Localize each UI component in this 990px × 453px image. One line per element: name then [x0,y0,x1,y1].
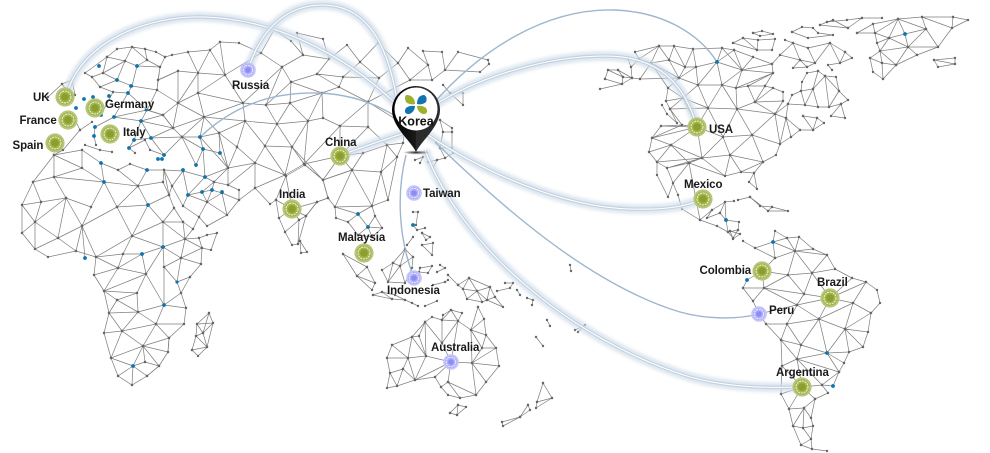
country labels: France [20,115,57,127]
arc: Korea to Argentina [425,150,802,387]
marker: Colombia [752,261,772,281]
country labels: Brazil [817,277,848,289]
country labels: Taiwan [423,188,461,200]
country labels: Indonesia [387,285,440,297]
country labels: USA [709,124,733,136]
country labels: China [325,137,357,149]
arc: Korea to USA [430,56,697,127]
mesh: Eurasia [48,30,489,253]
marker: Spain [45,133,65,153]
marker: Russia [240,62,256,78]
country labels: UK [33,92,50,104]
country labels: Colombia [700,265,752,277]
marker: Peru [751,306,767,322]
country labels: Malaysia [338,232,386,244]
arc: Korea to Russia [248,5,397,100]
country labels: Peru [769,305,794,317]
country labels: Italy [123,127,146,139]
marker: Germany [85,98,105,118]
mesh: Australia and New Zealand [387,307,552,426]
marker: China [330,146,350,166]
country labels: Australia [431,342,480,354]
arc: Korea to Peru [435,142,759,318]
arc: Korea to Canada hub [432,10,717,105]
country labels [12,80,848,379]
marker: Italy [100,124,120,144]
marker: Malaysia [354,243,374,263]
marker: UK [55,87,75,107]
country labels: Spain [12,140,43,152]
mesh: Greenland and Iceland [857,17,968,79]
marker: Mexico [693,189,713,209]
hub dots [74,32,907,388]
country labels: Mexico [684,179,722,191]
marker: Brazil [820,288,840,308]
marker: Taiwan [406,185,422,201]
country labels: Russia [232,80,270,92]
arc: Korea to Mexico [428,135,703,209]
marker: Australia [443,354,459,370]
marker: Argentina [792,377,812,397]
mesh: North America [600,18,882,238]
arc: Korea to UK [66,17,415,125]
mesh: Africa [22,150,239,385]
mesh: islands of East and Southeast Asia [343,85,585,346]
pin: Korea [392,86,440,154]
icon: Korea logo petals [405,95,427,114]
marker: USA [687,117,707,137]
country labels: Argentina [776,367,829,379]
country labels: Germany [105,99,155,111]
marker: France [58,110,78,130]
label: Korea: Korea [398,114,435,128]
arc: Korea to China [340,131,410,156]
arc: Korea to Indonesia [400,155,414,278]
arc: Korea to Middle East hub [200,93,412,137]
marker: Indonesia [406,270,422,286]
marker: India [282,199,302,219]
mesh: South America [730,231,880,451]
country labels: India [279,189,306,201]
